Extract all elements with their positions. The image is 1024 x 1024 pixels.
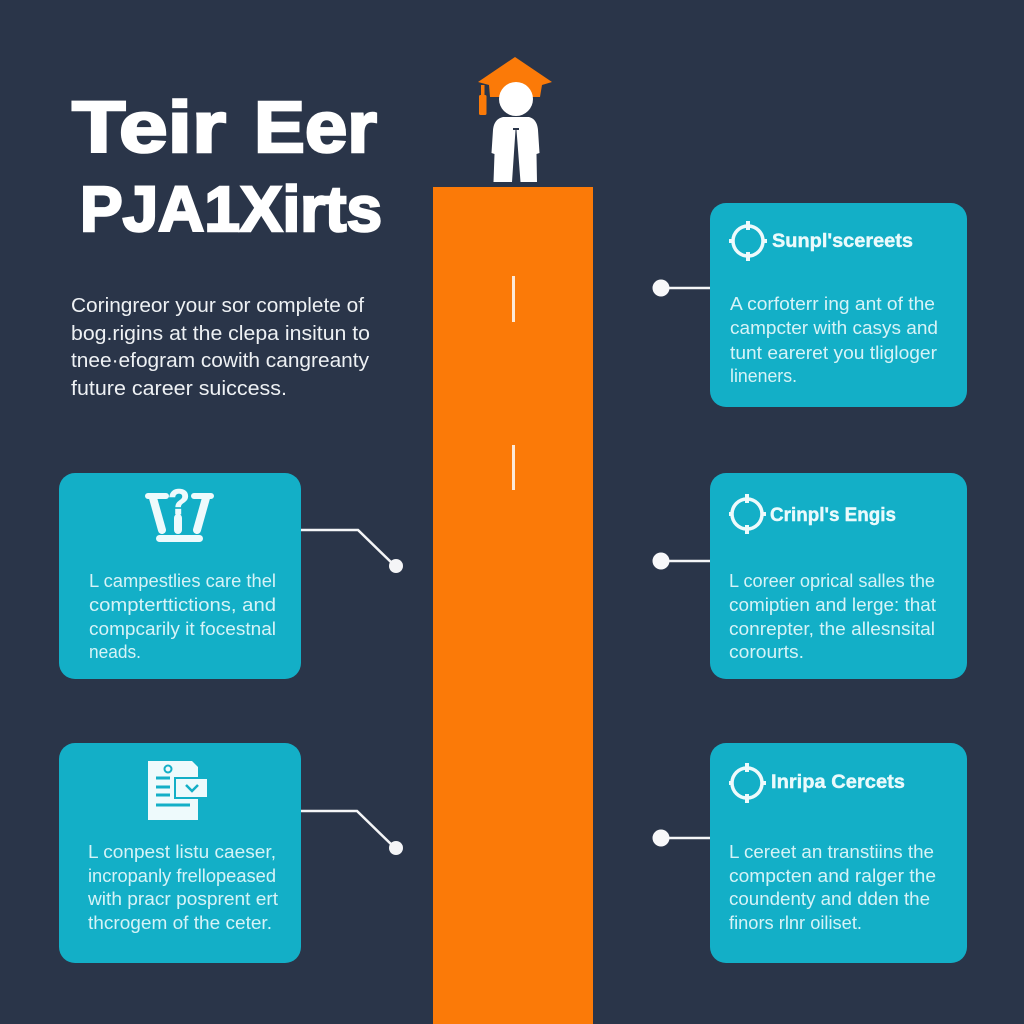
connector: left card 1 (301, 530, 403, 573)
card text: with pracr posprent ert (87, 889, 278, 909)
card text (730, 294, 938, 386)
card text: L coreer oprical salles the (729, 571, 935, 591)
card text: compterttictions, and (89, 595, 276, 615)
card heading: Inripa Cercets (771, 772, 905, 793)
intro text block: future career suiccess. (71, 377, 287, 400)
card text: neads. (89, 642, 141, 662)
icon: target (729, 221, 767, 261)
card text: campcter with casys and (730, 318, 938, 338)
intro text block (71, 294, 370, 400)
title: Teir (72, 88, 226, 168)
card text: incropanly frellopeased (88, 866, 276, 886)
title (72, 88, 382, 245)
icon: target (729, 763, 766, 803)
intro text block: tnee·efogram cowith cangreanty (71, 349, 370, 372)
card text: conrepter, the allesnsital (729, 619, 935, 639)
card heading: Crinpl's Engis (770, 505, 896, 526)
icon: question crown (148, 483, 211, 542)
card text (729, 842, 936, 933)
icon: question crown: ? (168, 483, 190, 522)
card text (87, 842, 278, 933)
panel: right card 1 (710, 203, 967, 407)
card text (89, 571, 276, 662)
intro text block: Coringreor your sor complete of (71, 294, 364, 317)
icon: document (148, 761, 208, 820)
connector: left card 2 (301, 811, 403, 855)
card text: L cereet an transtiins the (729, 842, 934, 862)
connector: right card 2 (652, 552, 710, 570)
card text: L conpest listu caeser, (88, 842, 276, 862)
card text: lineners. (730, 366, 797, 386)
card text: A corfoterr ing ant of the (730, 294, 935, 314)
card text: corourts. (729, 642, 804, 662)
intro text block: bog.rigins at the clepa insitun to (71, 322, 370, 345)
connector: right card 3 (652, 830, 710, 846)
card text: comiptien and lerge: that (729, 595, 936, 615)
card text: finors rlnr oiliset. (729, 913, 862, 933)
panel: right card 3 (710, 743, 967, 963)
panel: right card 2 (710, 473, 967, 679)
card text: tunt eareret you tligloger (730, 343, 937, 363)
card text: L campestlies care thel (89, 571, 276, 591)
icon: graduate figure (478, 57, 552, 182)
central orange bar (433, 187, 593, 1024)
panel: left card 1 (59, 473, 301, 679)
title: Eer (254, 88, 377, 168)
card text: compcten and ralger the (729, 866, 936, 886)
card text: compcarily it focestnal (89, 619, 276, 639)
card text (729, 571, 936, 662)
title: PJA1Xirts (80, 173, 382, 245)
connector: right card 1 (652, 280, 710, 296)
card text: coundenty and dden the (729, 889, 930, 909)
panel: left card 2 (59, 743, 301, 963)
card heading: Sunpl'scereets (772, 231, 913, 252)
card text: thcrogem of the ceter. (88, 913, 272, 933)
icon: target (729, 494, 766, 534)
